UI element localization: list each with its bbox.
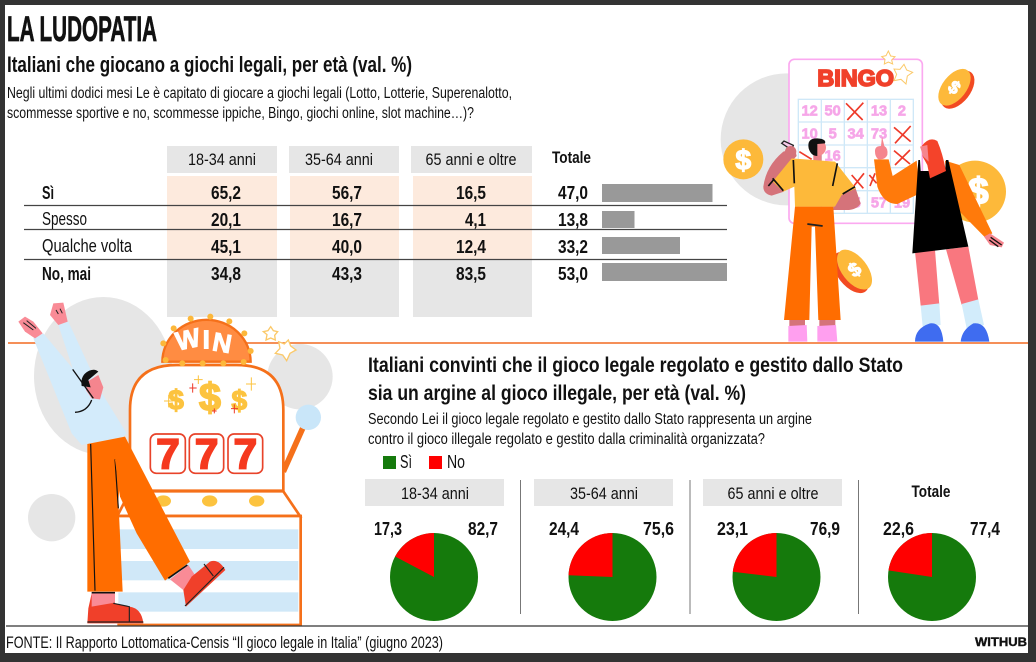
coin: left [723,139,763,179]
slot machine: 7 [195,431,219,479]
table: players by age: 34,8 [211,263,241,284]
slot machine: $ [232,385,248,416]
figure: man with marker [763,138,861,342]
table: players by age: 35-64 anni [305,150,373,169]
bingo card: 50 [825,103,841,119]
footer rule [6,625,1028,627]
heading: legal gambling as barrier: Italiani convinti che il gioco legale regolato e gestito dallo Stato [368,353,903,377]
section divider [8,342,1028,344]
figure: cheering man [18,303,225,623]
table: players by age: 65 anni e oltre [426,150,516,169]
pie panel: 65+: 76,9 [810,518,840,539]
table: players by age: 83,5 [456,263,486,284]
bingo card [789,51,922,223]
pie panel: 35-64: 75,6 [643,518,674,539]
legend [383,452,465,472]
coin: bottom: $ [845,259,866,282]
table: players by age: Spesso [42,208,87,229]
illustration: bingo card and players [721,51,1006,342]
slot machine: 7 [233,431,257,479]
pie panel: total: 77,4 [970,518,1001,539]
table: players by age: 33,2 [558,236,588,257]
table: players by age: 4,1 [465,209,486,230]
pie panel: 35-64: 35-64 anni [570,484,638,503]
table: players by age: 53,0 [558,263,588,284]
slot machine: $ [168,384,184,415]
slot machine: WIN [173,322,234,359]
question text [7,85,512,122]
coin: top right [931,63,981,115]
big coin [944,161,1006,223]
table: players by age: 56,7 [332,182,362,203]
slot machine: $ [199,376,221,420]
stars [882,51,913,84]
table: players by age: 12,4 [456,236,487,257]
heading: legal gambling as barrier: sia un argine al gioco illegale, per età (val. %) [368,381,746,405]
pie panel: 65+ [703,479,842,621]
publisher logo: WITHUB [975,635,1027,649]
pie panel: 18-34: 18-34 anni [401,484,469,503]
pie panel: 18-34: 17,3 [374,518,402,539]
pie panel: total: 22,6 [883,518,914,539]
bingo card: 5 [829,127,837,143]
question text: Negli ultimi dodici mesi Le è capitato di giocare a giochi legali (Lotto, Lotterie, Superenalotto, [7,85,512,102]
pie panel: 65+: 23,1 [717,518,748,539]
source note: FONTE: Il Rapporto Lottomatica-Censis “Il gioco legale in Italia” (giugno 2023) [6,634,443,652]
table: players by age: 13,8 [558,209,588,230]
big coin: $ [968,170,989,211]
question text 2 [368,411,812,448]
bingo card: 13 [871,103,887,119]
illustration: slot machine and cheering man [18,297,333,625]
table: players by age: 16,7 [332,209,362,230]
bingo card: 5 [853,196,861,212]
pie panel: 35-64: 24,4 [549,518,580,539]
table: players by age: No, mai [42,263,91,284]
table: players by age: Qualche volta [42,235,133,256]
bingo card: BINGO [817,65,894,91]
bingo card: 2 [898,103,906,119]
table: players by age: 43,3 [332,263,362,284]
bingo card: 34 [848,127,865,143]
table: players by age [24,146,727,317]
question text: scommesse sportive e no, scommesse ippiche, Bingo, giochi online, slot machine…)? [7,105,474,122]
table: players by age: 47,0 [558,182,588,203]
coin: left: $ [736,144,752,175]
question text 2: Secondo Lei il gioco legale regolato e gestito dallo Stato rappresenta un argine [368,411,812,428]
title: LA LUDOPATIA [7,10,157,49]
bingo card: 16 [825,149,841,165]
table: players by age: Sì [42,182,54,203]
heading: players by age: Italiani che giocano a giochi legali, per età (val. %) [7,52,412,77]
pie panel: total: Totale [912,482,950,501]
pie panel: 35-64 [534,479,674,621]
bingo card: 10 [802,127,818,143]
stars [263,327,296,361]
table: players by age: 20,1 [211,209,241,230]
heading: legal gambling as barrier [368,353,903,405]
coin: top right: $ [944,77,964,98]
table: players by age: 18-34 anni [188,150,256,169]
legend: No [447,452,465,472]
bingo card: 12 [802,103,818,119]
bingo card: 73 [871,127,887,143]
table: players by age: 16,5 [456,182,486,203]
bar chart: totals [602,184,727,281]
table: players by age: 45,1 [211,236,241,257]
figure: woman in black dress [874,137,1004,342]
table: players by age: 65,2 [211,182,241,203]
slot machine: 7 [156,431,180,479]
pie panel: 18-34 [365,479,504,621]
table: players by age: Totale [552,148,591,167]
pie panel: 65+: 65 anni e oltre [728,484,818,503]
coin: bottom [826,243,879,300]
pie panel: 18-34: 82,7 [468,518,498,539]
bingo card: 57 [871,196,887,212]
table: players by age: 40,0 [332,236,362,257]
bingo card: 19 [894,196,910,212]
question text 2: contro il gioco illegale regolato e gestito dalla criminalità organizzata? [368,431,765,448]
legend: Sì [400,452,412,472]
slot machine [117,314,321,625]
pie panel: total [883,482,1001,621]
